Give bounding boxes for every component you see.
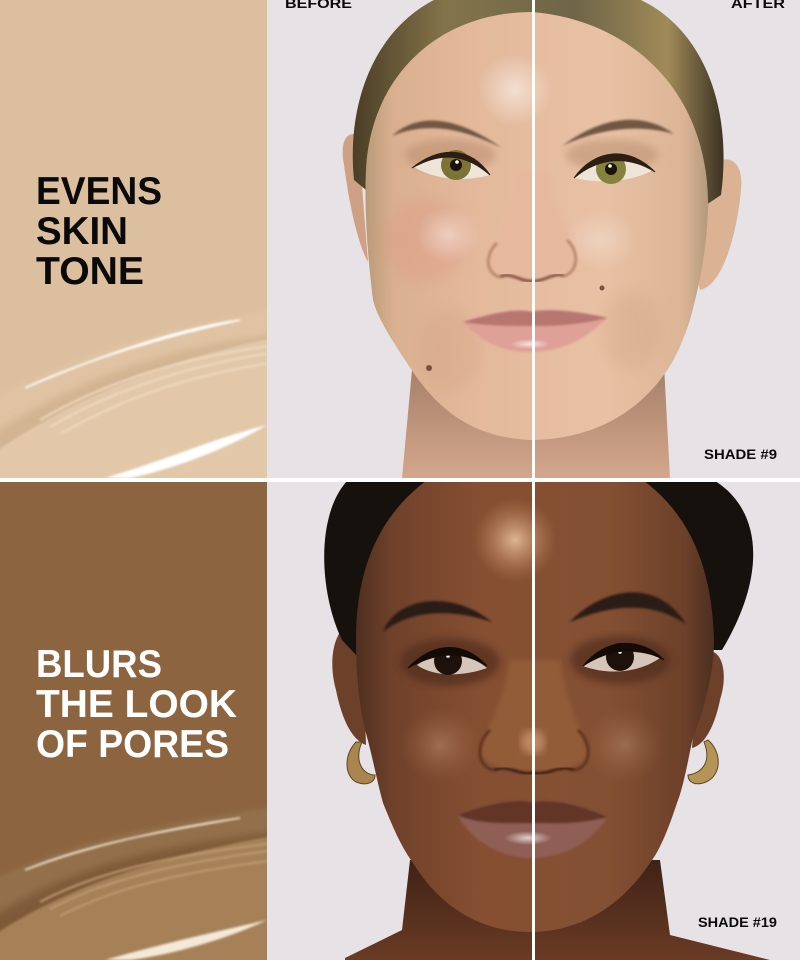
eyes — [408, 643, 664, 675]
ears — [332, 623, 724, 748]
forehead shine — [478, 504, 552, 576]
hair — [324, 478, 753, 655]
lips — [457, 801, 608, 858]
nose — [480, 660, 588, 773]
cheek highlights — [412, 719, 651, 772]
neck and shoulders — [345, 860, 770, 960]
face — [356, 478, 714, 932]
earrings — [347, 740, 718, 784]
foundation smear: tan — [0, 809, 267, 960]
eyebrows — [383, 592, 686, 632]
moles — [426, 286, 604, 371]
eyes — [412, 150, 655, 184]
eye sockets — [404, 139, 658, 171]
hair — [353, 0, 724, 205]
heading: blurs the look of pores: THE LOOK — [36, 683, 237, 726]
face — [365, 12, 708, 440]
forehead shine — [483, 60, 546, 120]
eyebrows — [392, 120, 674, 148]
foundation smear: light — [0, 318, 267, 478]
eye sockets — [400, 636, 670, 686]
nose — [486, 238, 578, 282]
label: shade 9: SHADE #9 — [704, 446, 777, 462]
cheek redness and highlights — [391, 204, 652, 375]
heading: evens skin tone: TONE — [36, 250, 144, 293]
heading: evens skin tone: SKIN — [36, 210, 128, 253]
panel: bottom portrait before and after — [324, 482, 770, 960]
panel: blurs pores swatch — [0, 482, 267, 960]
heading: evens skin tone — [36, 170, 162, 293]
lips — [463, 310, 607, 352]
panel: evens skin tone swatch — [0, 0, 267, 478]
label: shade 19: SHADE #19 — [698, 914, 777, 930]
heading: blurs the look of pores: BLURS — [36, 643, 162, 686]
vertical divider — [532, 0, 535, 960]
heading: blurs the look of pores — [36, 643, 237, 766]
heading: evens skin tone: EVENS — [36, 170, 162, 213]
panel: top portrait before and after — [342, 0, 742, 478]
ears — [343, 134, 741, 290]
neck — [402, 365, 670, 478]
heading: blurs the look of pores: OF PORES — [36, 723, 229, 766]
horizontal divider — [0, 478, 800, 482]
